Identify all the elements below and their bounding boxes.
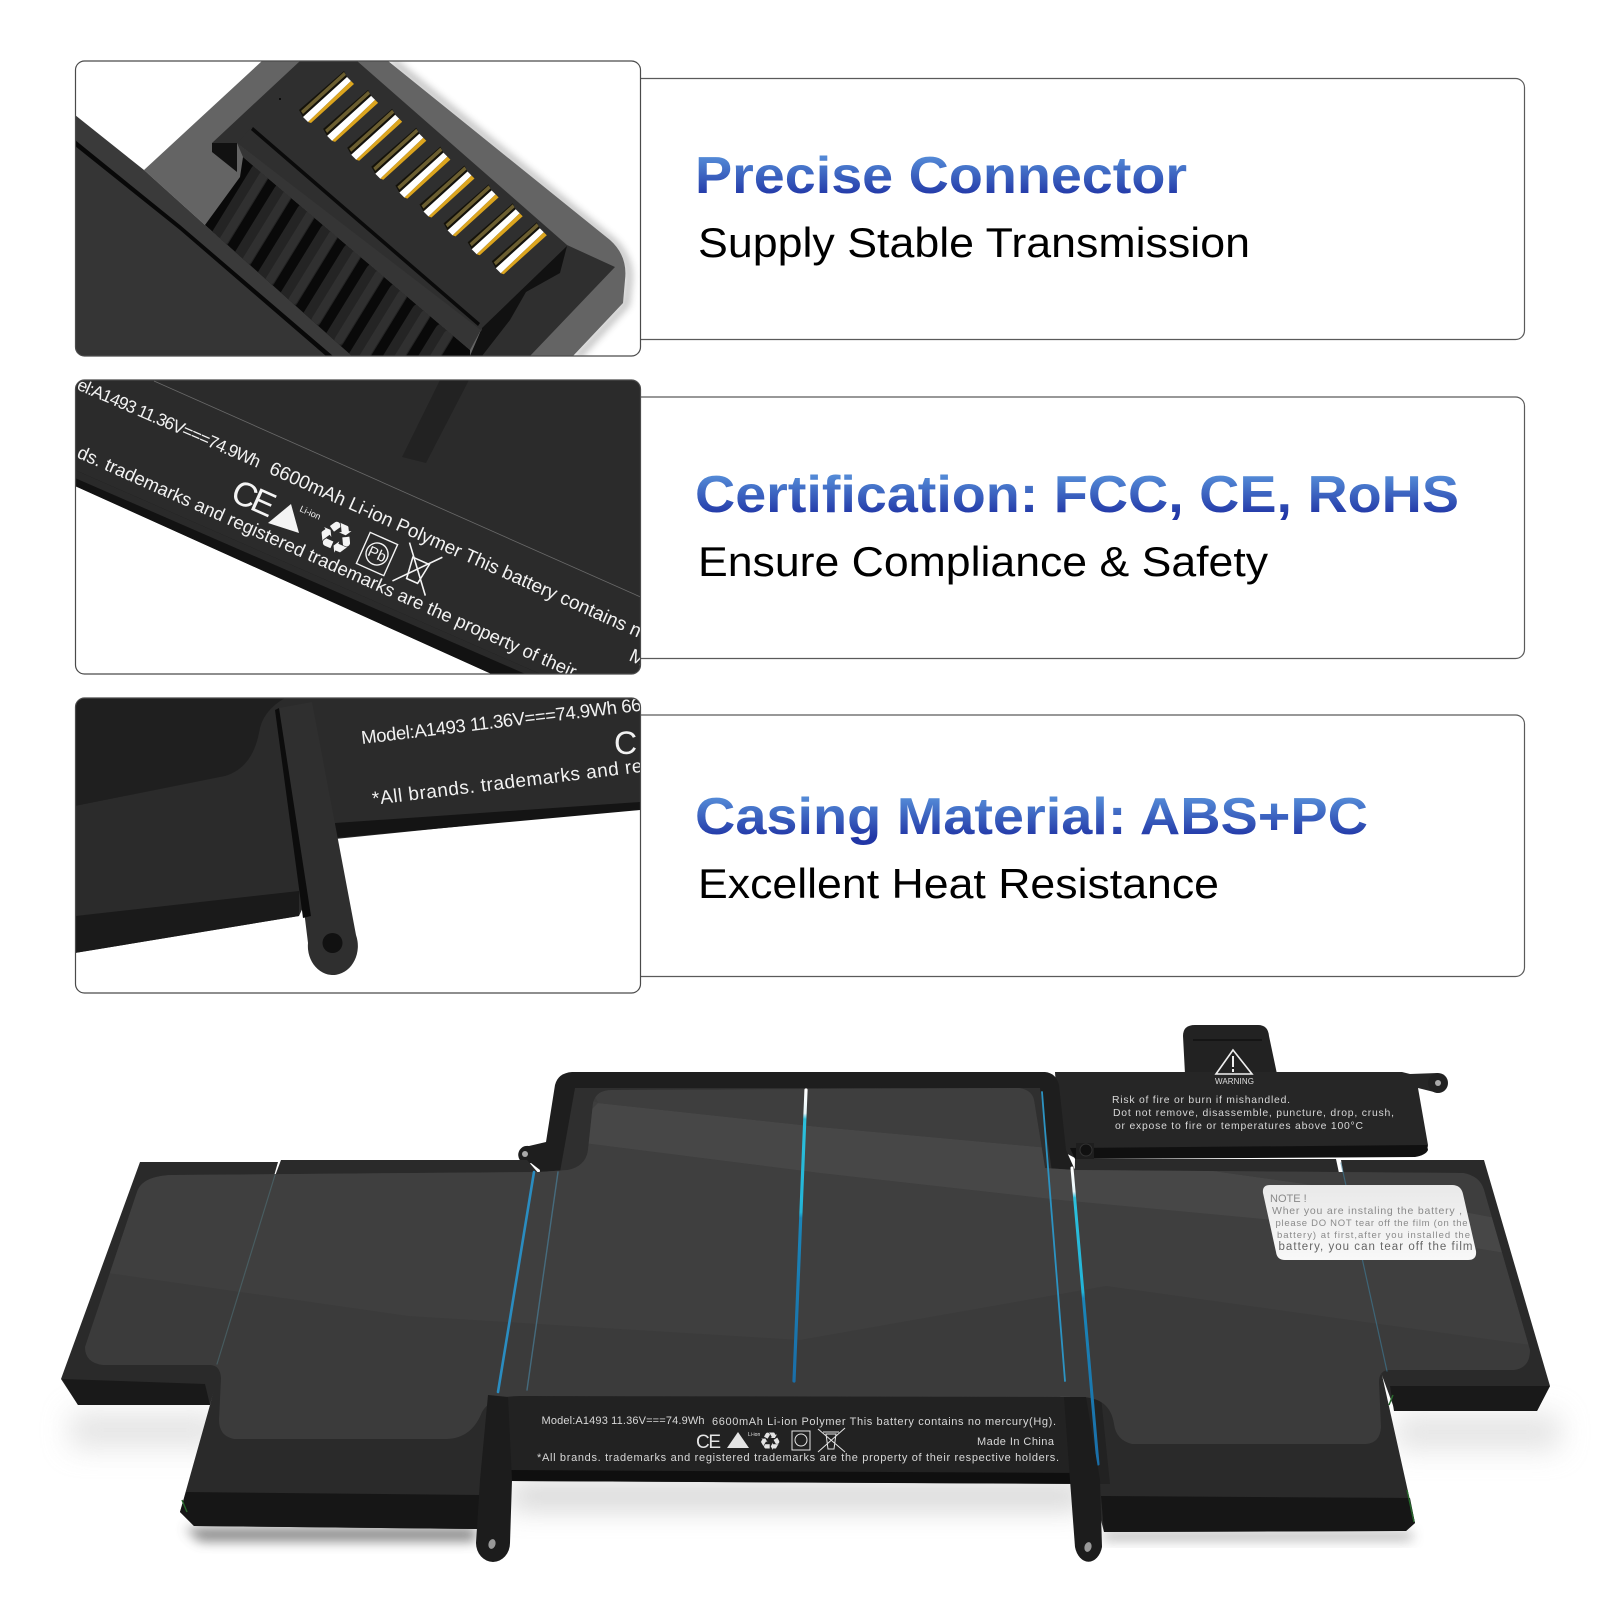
white background corner [75, 486, 496, 676]
heading: precise connector: Precise Connector [695, 147, 1187, 205]
center label text: 6600mAh Li-ion Polymer This battery contains no mercury(Hg). [712, 1416, 1056, 1428]
panel: certification photo [74, 374, 649, 682]
center label icons [696, 1427, 845, 1456]
note sticker: battery) at first,after you installed the [1277, 1230, 1470, 1241]
certification icons: CE [226, 473, 281, 525]
printed label text: 6600mAh Li-ion Polymer This battery contains n [266, 458, 644, 642]
warning tab and block [1055, 1025, 1448, 1159]
connector housing [212, 61, 615, 356]
certification icons: Li-ion [298, 504, 322, 522]
printed label text: ds. trademarks and registered trademarks are the property of their [74, 441, 580, 682]
center label strip [490, 1395, 1110, 1484]
certification icons: ♻ [309, 507, 363, 567]
note sticker: please DO NOT tear off the film (on the [1276, 1218, 1468, 1229]
center frame [518, 1072, 1075, 1400]
warning text [1112, 1095, 1394, 1132]
warning text: Risk of fire or burn if mishandled. [1112, 1095, 1290, 1106]
battery body [75, 698, 640, 953]
panel: connector photo [74, 60, 642, 357]
strap with mounting hole [275, 702, 358, 975]
warning text: or expose to fire or temperatures above 100°C [1115, 1121, 1363, 1132]
subtitle: ensure compliance: Ensure Compliance & Safety [698, 538, 1268, 585]
note sticker: NOTE ! [1270, 1193, 1307, 1205]
left mounting tab [476, 1395, 512, 1562]
note sticker: Wher you are instaling the battery , [1272, 1205, 1462, 1217]
panel: casing photo [75, 694, 644, 993]
note sticker [1263, 1185, 1476, 1260]
center label text: Made In China [977, 1436, 1055, 1448]
certification icons [234, 482, 443, 596]
note sticker: battery, you can tear off the film [1278, 1241, 1472, 1253]
panel: certification text [620, 397, 1524, 658]
subtitle: supply stable transmission: Supply Stable Transmission [698, 219, 1250, 266]
ribbon wires [205, 157, 470, 356]
printed label text: *All brands. trademarks and re [371, 756, 644, 810]
printed label text: M [626, 645, 649, 671]
center label text [537, 1415, 1059, 1464]
printed label text: Model:A1493 11.36V===74.9Wh 66 [360, 694, 642, 748]
warning icon [1215, 1050, 1254, 1086]
certification icons: Pb [365, 543, 389, 566]
left outer cell [61, 1162, 278, 1405]
battery plate [144, 61, 625, 356]
printed label text: C [614, 725, 637, 761]
printed label text: el:A1493 11.36V===74.9Wh [74, 374, 264, 472]
right outer cell [1341, 1160, 1550, 1411]
ground shadows [70, 1412, 1560, 1541]
center label icons: ♻ [759, 1427, 781, 1456]
panel: precise connector text [620, 78, 1524, 340]
center label icons: CE [696, 1432, 721, 1453]
right mounting tab [1064, 1397, 1102, 1562]
center label text: *All brands. trademarks and registered trademarks are the property of their respective holders. [537, 1452, 1059, 1464]
battery photo [60, 1025, 1560, 1562]
center label icons: Li-ion [748, 1432, 760, 1438]
gold connector pins [299, 71, 547, 274]
panel: casing material text [620, 715, 1524, 976]
battery body [75, 115, 353, 356]
right main cell [1070, 1159, 1415, 1532]
printed label text [362, 699, 640, 804]
subtitle: excellent heat resistance: Excellent Heat Resistance [698, 860, 1219, 907]
left main cell [180, 1160, 540, 1529]
heading: certification: Certification: FCC, CE, RoHS [695, 466, 1459, 524]
warning icon: WARNING [1215, 1077, 1254, 1086]
heading: casing material: Casing Material: ABS+PC [695, 788, 1368, 846]
center label text: Model:A1493 11.36V===74.9Wh [542, 1415, 704, 1427]
green edges [182, 1395, 1414, 1522]
transparent film [85, 1088, 1530, 1444]
film blue pull strips [217, 1090, 1387, 1464]
printed label text [74, 374, 649, 682]
warning text: Dot not remove, disassemble, puncture, drop, crush, [1113, 1108, 1394, 1119]
